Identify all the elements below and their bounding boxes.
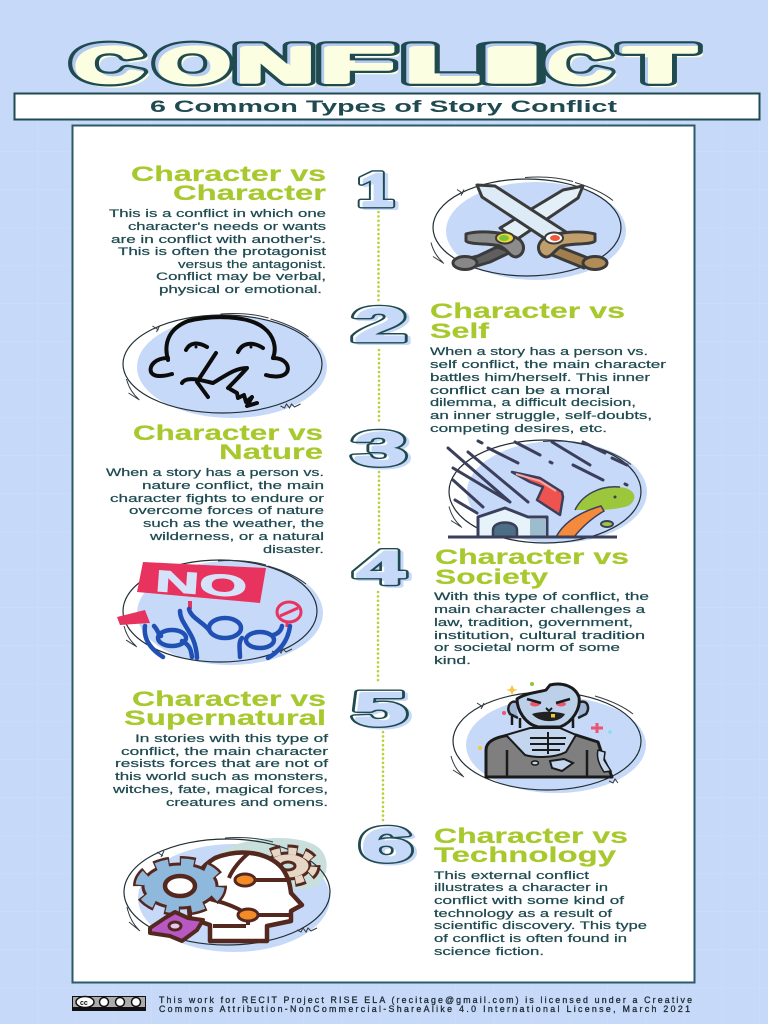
footer: Creative Commons badge [72, 996, 146, 1011]
section 2 text: character vs self [430, 300, 666, 435]
title: CONFLICT: L [408, 38, 482, 96]
section 2 text: character vs self: battles him/herself. This inner [430, 372, 650, 384]
section 6 text: character vs technology: This external conflict [434, 870, 590, 882]
section 3 text: character vs nature: nature conflict, the main [142, 480, 324, 492]
section 1 text: character vs character: physical or emotional. [159, 284, 322, 296]
title: CONFLICT: N [238, 38, 318, 96]
section 2 text: character vs self: self conflict, the main character [430, 359, 666, 371]
section 1 text: character vs character: Character vs [131, 163, 326, 186]
section 5 text: character vs supernatural: witches, fate, magical forces, [112, 784, 328, 796]
icon: robot head with gears [124, 838, 330, 952]
section 5 text: character vs supernatural: conflict, the main character [121, 746, 328, 758]
section 2 text: character vs self: When a story has a person vs. [430, 346, 648, 358]
section 3 text: character vs nature: disaster. [263, 544, 324, 556]
number 4: 4 [354, 542, 405, 595]
section 1 text: character vs character: Conflict may be verbal, [156, 271, 326, 283]
footer: license text [159, 995, 692, 1014]
number 4: 4 [358, 544, 409, 597]
section 4 text: character vs society: main character challenges a [434, 604, 646, 616]
section 6 text: character vs technology: technology as a result of [434, 908, 613, 920]
section 1 text: character vs character: are in conflict with another's. [111, 234, 326, 246]
section 2 text: character vs self: an inner struggle, self-doubts, [430, 410, 652, 422]
number 1: 1 [357, 164, 394, 217]
section 2 text: character vs self: dilemma, a difficult decision, [430, 397, 636, 409]
number 5: 5 [352, 683, 406, 736]
section 6 text: character vs technology: science fiction. [434, 946, 544, 958]
section 3 text: character vs nature: Character vs [133, 422, 323, 445]
number 6 [358, 824, 417, 866]
section 3 text: character vs nature: wilderness, or a natural [148, 531, 324, 543]
section 1 text: character vs character [109, 163, 327, 296]
footer: license text: Commons Attribution-NonCommercial-ShareAlike 4.0 International License, March 2021 [159, 1004, 690, 1014]
section 2 text: character vs self: competing desires, etc. [430, 423, 607, 435]
footer: license text: This work for RECIT Project RISE ELA (recitage@gmail.com) is licensed under a Creative [159, 995, 692, 1005]
section 1 text: character vs character: versus the antagonist. [178, 259, 326, 271]
section 3 text: character vs nature: Nature [219, 441, 323, 464]
section 4 text: character vs society: or societal norm of some [434, 642, 620, 654]
number 6: 6 [364, 821, 416, 874]
title: CONFLICT: C [550, 38, 614, 96]
title: CONFLICT: C [72, 36, 142, 94]
section 6 text: character vs technology: Character vs [434, 825, 628, 848]
title: CONFLICT: T [623, 36, 695, 94]
title: CONFLICT: N [234, 36, 314, 94]
icon: storm over house [448, 440, 647, 543]
section 6 text: character vs technology: conflict with some kind of [434, 895, 625, 907]
title: CONFLICT: I [484, 38, 546, 96]
section 5 text: character vs supernatural: this world such as monsters, [115, 771, 328, 783]
number 1 [358, 170, 398, 210]
title: CONFLICT: F [318, 36, 394, 94]
number 2: 2 [352, 299, 406, 352]
number 1: 1 [361, 166, 398, 219]
section 3 text: character vs nature [106, 422, 324, 556]
title: CONFLICT: I [480, 36, 542, 94]
title: CONFLICT [68, 40, 703, 88]
number 3: 3 [356, 425, 410, 478]
number 5 [350, 690, 412, 730]
section 6 text: character vs technology: of conflict is often found in [434, 933, 627, 945]
section 6 text: character vs technology [434, 825, 647, 958]
section 4 text: character vs society: Character vs [435, 546, 629, 569]
timeline dotted connectors [378, 212, 383, 822]
icon: protest with NO sign: NO [154, 565, 248, 604]
title: CONFLICT: L [404, 36, 478, 94]
section 4 text: character vs society: kind. [434, 655, 471, 667]
section 5 text: character vs supernatural: resists forces that are not of [115, 758, 329, 770]
section 5 text: character vs supernatural: creatures and omens. [166, 797, 328, 809]
section 5 text: character vs supernatural: Character vs [132, 688, 326, 711]
number 2 [350, 304, 411, 345]
title: CONFLICT: T [627, 38, 699, 96]
section 5 text: character vs supernatural: In stories with this type of [135, 733, 329, 745]
icon: zombie [451, 682, 646, 793]
section 1 text: character vs character: This is a conflict in which one [109, 208, 326, 220]
subtitle bar: 6 Common Types of Story Conflict [150, 97, 618, 116]
section 3 text: character vs nature: such as the weather, the [143, 518, 324, 530]
number 5: 5 [356, 685, 410, 738]
section 6 text: character vs technology: Technology [434, 844, 616, 867]
title: CONFLICT: O [156, 36, 230, 94]
icon: pondering face [123, 314, 327, 418]
number 6: 6 [360, 819, 412, 872]
section 6 text: character vs technology: scientific discovery. This type [434, 920, 647, 932]
section 3 text: character vs nature: character fights to endure or [110, 493, 324, 505]
section 2 text: character vs self: conflict can be a moral [430, 385, 610, 397]
section 2 text: character vs self: Self [430, 320, 491, 343]
section 2 text: character vs self: Character vs [430, 300, 625, 323]
subtitle bar [14, 94, 760, 120]
title: CONFLICT: C [76, 38, 146, 96]
number 4 [351, 548, 412, 588]
section 5 text: character vs supernatural: Supernatural [124, 707, 326, 730]
section 4 text: character vs society: law, tradition, government, [434, 617, 633, 629]
main white panel [72, 126, 694, 982]
title: CONFLICT: O [160, 38, 234, 96]
section 6 text: character vs technology: illustrates a character in [434, 882, 608, 894]
icon: crossed swords [431, 177, 626, 280]
section 4 text: character vs society [434, 546, 649, 667]
section 1 text: character vs character: Character [173, 182, 326, 205]
title: CONFLICT: C [546, 36, 610, 94]
title: CONFLICT: F [322, 38, 398, 96]
section 3 text: character vs nature: overcome forces of nature [129, 505, 324, 517]
section 1 text: character vs character: This is often the protagonist [118, 246, 327, 258]
section 5 text: character vs supernatural [112, 688, 329, 809]
footer: Creative Commons badge: cc [80, 1000, 88, 1007]
number 3 [349, 428, 411, 470]
number 2: 2 [356, 301, 410, 354]
section 1 text: character vs character: character's needs or wants [128, 221, 327, 233]
section 4 text: character vs society: institution, cultural tradition [434, 630, 645, 642]
section 4 text: character vs society: Society [435, 566, 548, 589]
section 4 text: character vs society: With this type of conflict, the [434, 591, 649, 603]
icon: protest with NO sign [117, 560, 323, 665]
section 3 text: character vs nature: When a story has a person vs. [106, 467, 324, 479]
number 3: 3 [352, 423, 406, 476]
